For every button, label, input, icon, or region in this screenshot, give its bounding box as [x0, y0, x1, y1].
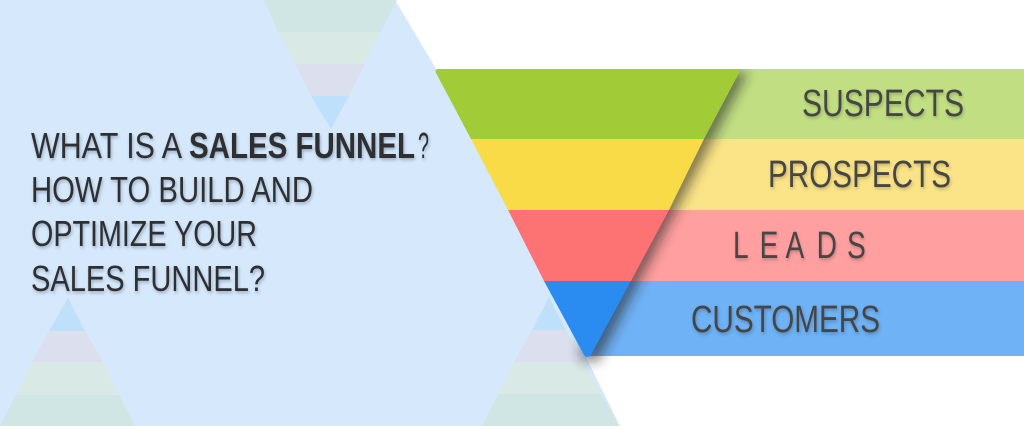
label: leads: LEADS [733, 225, 866, 267]
funnel [435, 69, 740, 357]
funnel shadow [580, 70, 748, 362]
title: ? [418, 125, 429, 166]
title: HOW TO BUILD AND [31, 169, 313, 210]
band: suspects [600, 69, 1024, 139]
title: SALES FUNNEL [189, 125, 415, 166]
title: SALES FUNNEL? [31, 258, 265, 299]
decorative pyramid: bottom centre [482, 297, 619, 426]
label: customers: CUSTOMERS [691, 299, 880, 341]
funnel tier: yellow [471, 139, 704, 210]
decorative pyramid: bottom left [0, 298, 135, 426]
decorative funnel: top [264, 0, 397, 129]
panel: light blue background [0, 0, 620, 426]
label: suspects: SUSPECTS [802, 83, 964, 125]
funnel tier: blue [544, 281, 631, 357]
band: customers [590, 281, 1024, 356]
label: prospects: PROSPECTS [768, 154, 951, 196]
funnel tier: red [508, 210, 669, 281]
title: WHAT IS A [31, 125, 182, 166]
funnel tier: green [435, 69, 740, 139]
title [31, 125, 429, 299]
band: leads [600, 210, 1024, 281]
title: OPTIMIZE YOUR [31, 213, 257, 254]
band: prospects [600, 139, 1024, 210]
